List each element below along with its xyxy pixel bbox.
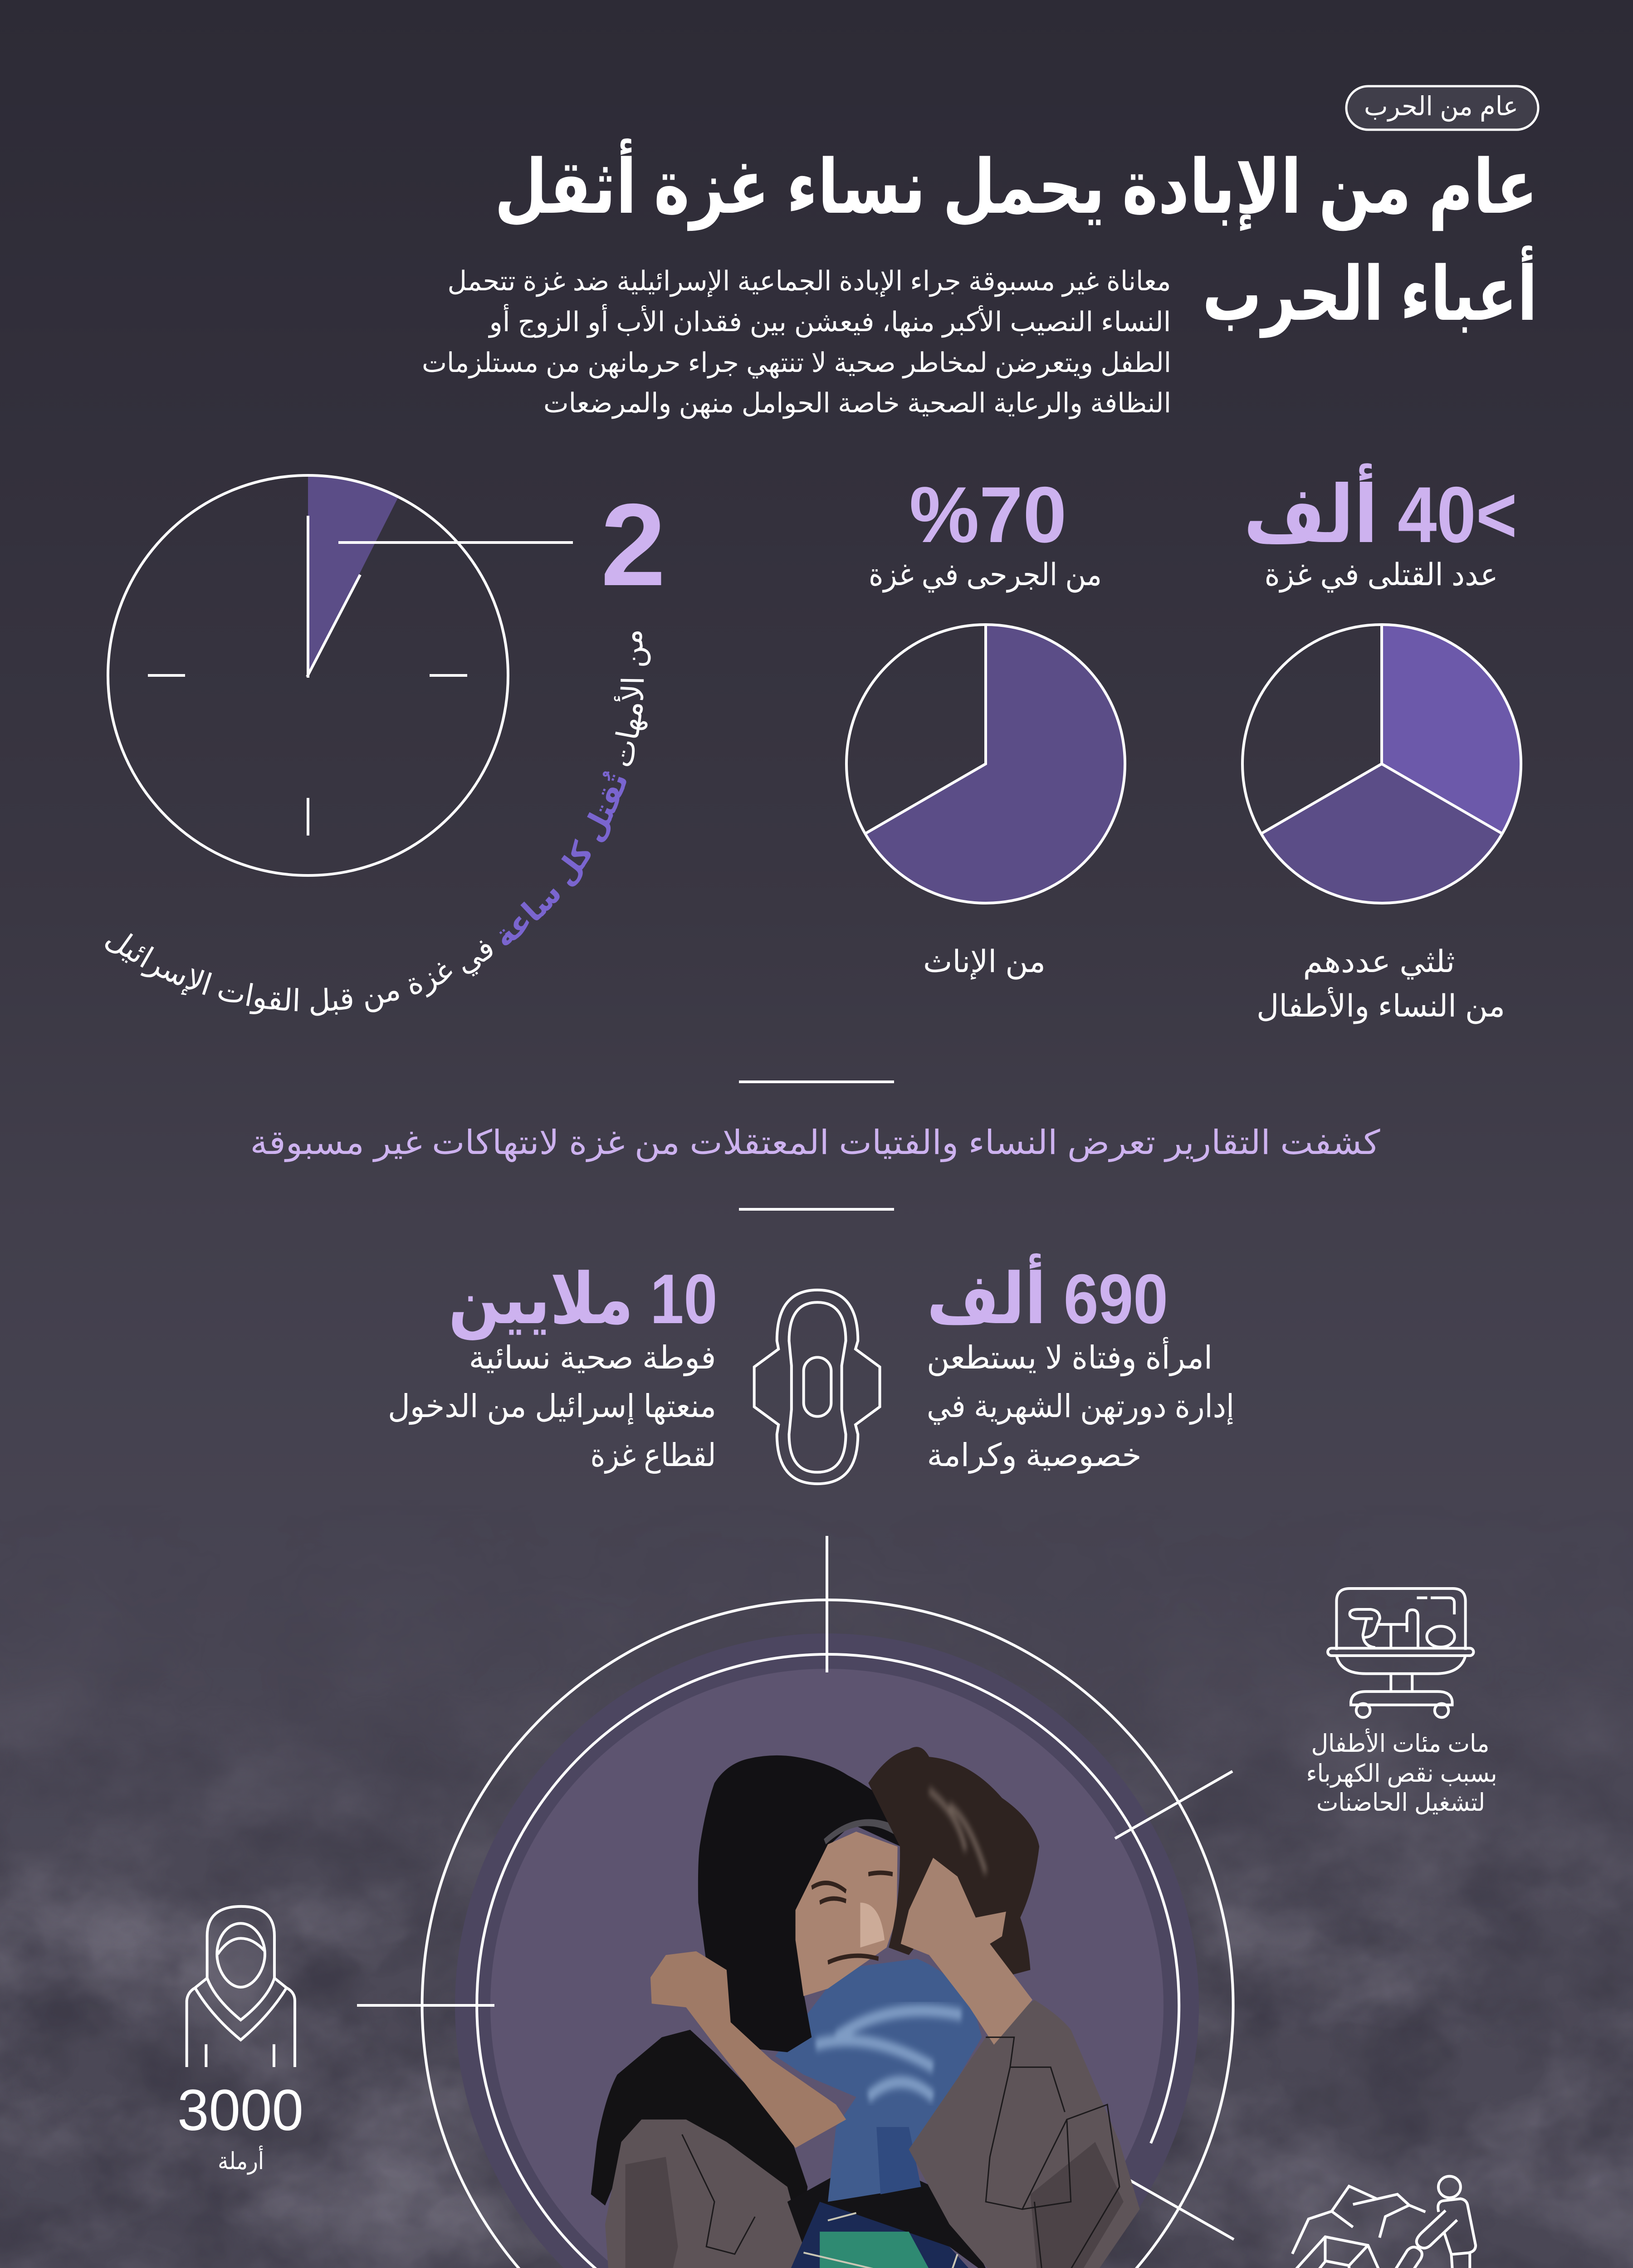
- stat: 690 thousand: إدارة دورتهن الشهرية في: [927, 1388, 1234, 1425]
- stat: 690 thousand: 690 ألف: [927, 1253, 1168, 1338]
- section statement: [250, 1080, 1380, 1211]
- intro paragraph: النظافة والرعاية الصحية خاصة الحوامل منهن والمرضعات: [543, 388, 1171, 419]
- panel: killed: >40 ألف: [1244, 463, 1517, 559]
- icon: rubble rescue: [1292, 2176, 1476, 2268]
- clock chart: [108, 475, 573, 875]
- panel: wounded: %70: [909, 471, 1067, 559]
- stat: 690 thousand: خصوصية وكرامة: [927, 1437, 1141, 1474]
- panel: killed: ثلثي عددهم: [1303, 944, 1455, 980]
- panel: wounded: [846, 471, 1125, 980]
- intro paragraph: معاناة غير مسبوقة جراء الإبادة الجماعية الإسرائيلية ضد غزة تتحمل: [447, 266, 1171, 297]
- panel: killed: عدد القتلى في غزة: [1265, 557, 1498, 593]
- stat: 690 thousand: [927, 1253, 1234, 1474]
- intro paragraph: الطفل ويتعرضن لمخاطر صحية لا تنتهي جراء حرمانهن من مستلزمات: [422, 347, 1171, 379]
- intro paragraph: [422, 266, 1171, 419]
- stat: 10 million pads: فوطة صحية نسائية: [469, 1340, 716, 1376]
- panel: killed: من النساء والأطفال: [1257, 987, 1505, 1024]
- intro paragraph: النساء النصيب الأكبر منها، فيعشن بين فقدان الأب أو الزوج أو: [488, 304, 1171, 338]
- background with rubble texture: [0, 654, 1633, 2268]
- stat: 10 million pads: منعتها إسرائيل من الدخول: [388, 1388, 716, 1425]
- panel: wounded: من الجرحى في غزة: [869, 557, 1102, 593]
- caption: incubators: [1306, 1728, 1497, 1816]
- panel: wounded: من الإناث: [923, 944, 1046, 980]
- central disc and rings: [357, 1536, 1234, 2268]
- header tag pill: عام من الحرب: [1364, 92, 1518, 122]
- caption: incubators: مات مئات الأطفال: [1311, 1728, 1490, 1757]
- panel: killed: [1242, 463, 1521, 1024]
- caption: incubators: بسبب نقص الكهرباء: [1306, 1760, 1497, 1788]
- title: أعباء الحرب: [1202, 245, 1538, 338]
- header tag pill: [1346, 86, 1538, 130]
- stat: 690 thousand: امرأة وفتاة لا يستطعن: [927, 1337, 1213, 1377]
- icon: widow: [187, 1906, 295, 2067]
- curved caption: من الأمهات تُقتل كل ساعة في غزة من قبل القوات الإسرائيل: [100, 628, 651, 1018]
- section statement: كشفت التقارير تعرض النساء والفتيات المعتقلات من غزة لانتهاكات غير مسبوقة: [250, 1124, 1380, 1162]
- stat: 2 mothers: 2: [601, 479, 666, 610]
- stat: 10 million pads: لقطاع غزة: [591, 1437, 716, 1474]
- stat: 10 million pads: [388, 1260, 718, 1474]
- stat: widows: أرملة: [218, 2146, 264, 2175]
- stat: widows: [177, 2078, 303, 2175]
- photo: mother carrying child: [584, 1747, 1140, 2268]
- title: [494, 138, 1538, 338]
- stat: widows: 3000: [177, 2078, 303, 2143]
- stat: 10 million pads: 10 ملايين: [448, 1260, 718, 1340]
- icon: sanitary pad: [754, 1290, 880, 1484]
- caption: incubators: لتشغيل الحاضنات: [1316, 1789, 1485, 1816]
- icon: incubator: [1328, 1589, 1473, 1717]
